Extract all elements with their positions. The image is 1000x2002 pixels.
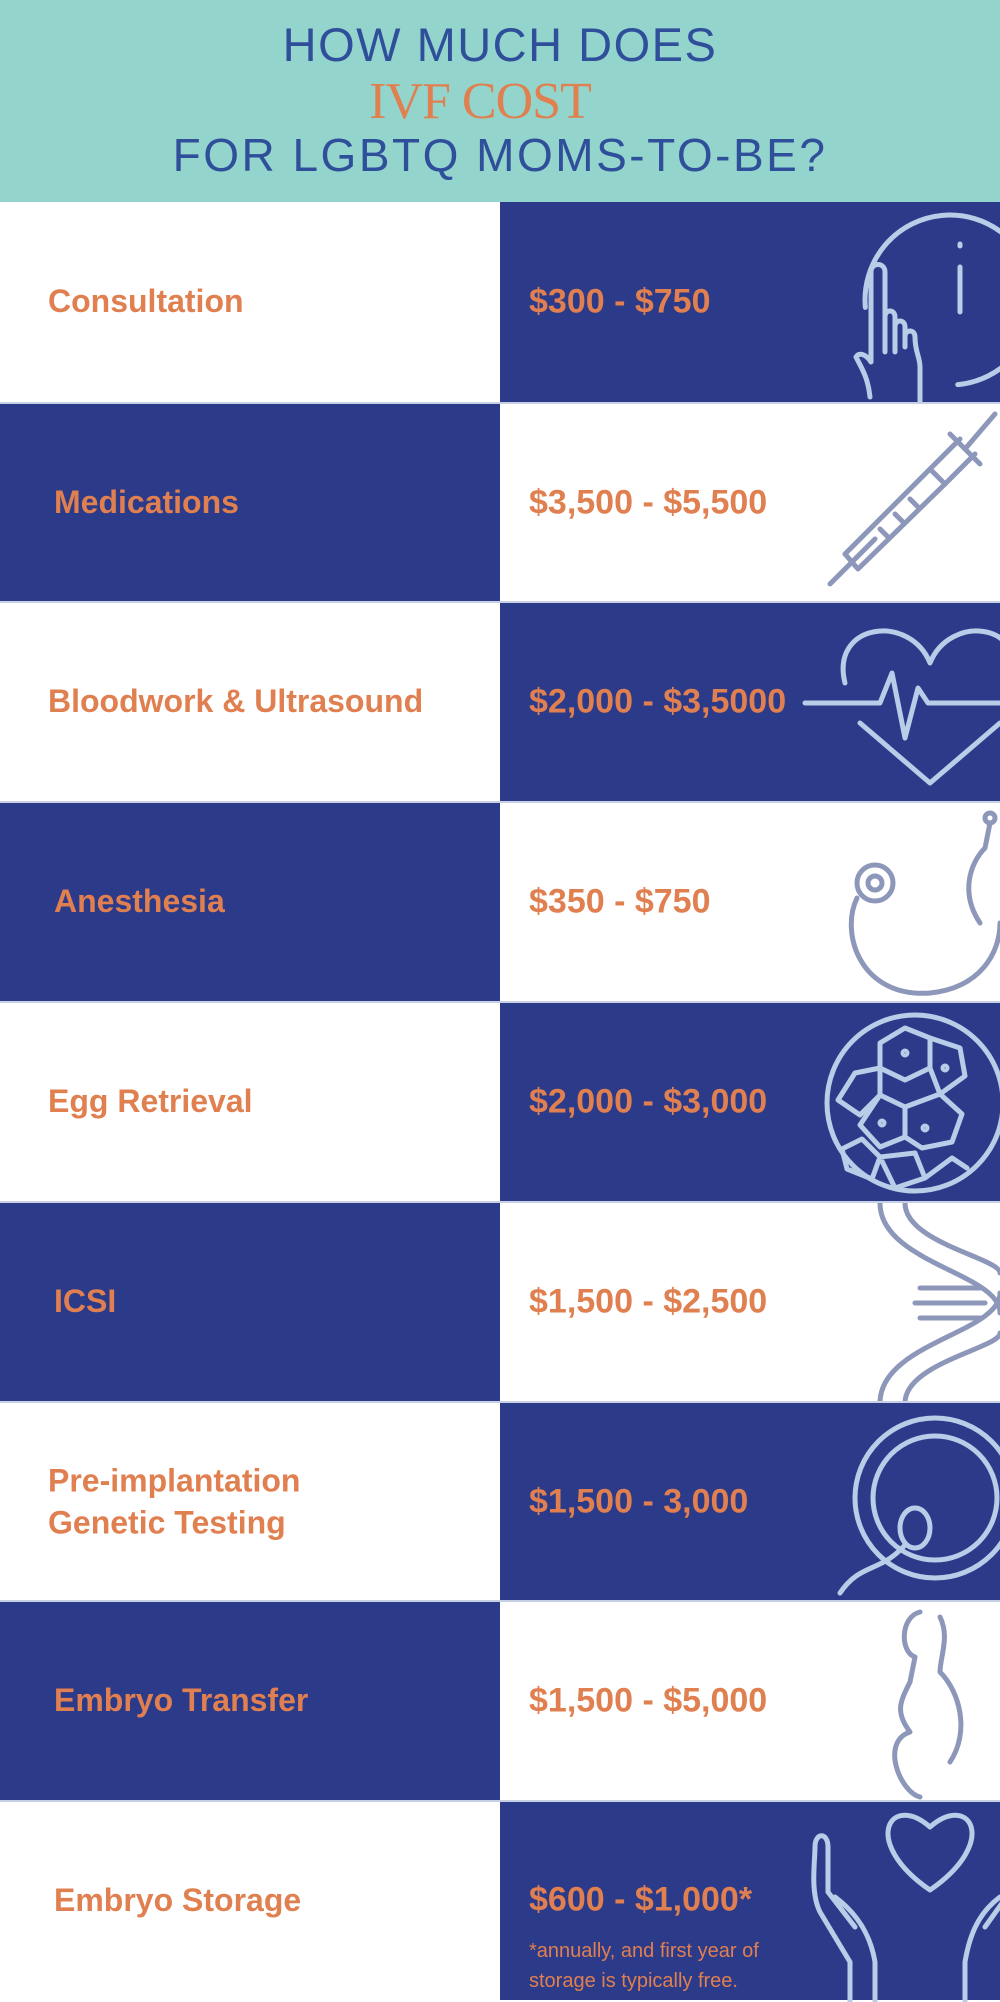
row: egg retrieval: $2,000 - $3,000 [529,1082,767,1120]
row: pgt: $1,500 - 3,000 [529,1482,748,1520]
row: bloodwork: $2,000 - $3,5000 [529,682,786,720]
row: medications: Medications [54,484,239,520]
title highlight: IVF COST [369,73,591,130]
icon: hands with heart [811,1812,1000,2002]
title line 3: FOR LGBTQ MOMS-TO-BE? [173,129,827,181]
icon: egg and sperm [838,1416,1000,1596]
row: icsi: ICSI [54,1283,116,1319]
title line 1: HOW MUCH DOES [283,18,717,71]
row: embryo transfer [0,1600,1000,1800]
footnote: *annually, and first year of [529,1940,759,1962]
row: embryo transfer: Embryo Transfer [54,1682,308,1718]
footnote [529,1940,759,1992]
row: medications: $3,500 - $5,500 [529,484,767,522]
row: icsi [0,1201,1000,1401]
row: bloodwork [0,601,1000,801]
icon: syringe [828,412,998,586]
header [0,0,1000,202]
icon: cell cluster [824,1012,1000,1194]
footnote: storage is typically free. [529,1970,738,1992]
row: embryo storage [0,1800,1000,2000]
row: medications [0,402,1000,602]
row: bloodwork: Bloodwork & Ultrasound [48,683,423,719]
row: pgt: Pre-implantation [48,1462,300,1498]
icon: info hand [854,212,1000,402]
row: consultation: Consultation [48,283,244,319]
row: embryo storage: Embryo Storage [54,1882,301,1918]
row: pgt: Genetic Testing [48,1504,286,1540]
row: anesthesia [0,801,1000,1001]
row: embryo transfer: $1,500 - $5,000 [529,1682,767,1720]
row: egg retrieval [0,1001,1000,1201]
row: pgt [0,1401,1000,1601]
row: consultation [48,202,1000,402]
row: consultation: $300 - $750 [529,282,710,320]
row: anesthesia: Anesthesia [54,883,225,919]
row: anesthesia: $350 - $750 [529,882,710,920]
icon: stethoscope [848,810,1000,996]
price: $600 - $1,000* [529,1880,752,1918]
icon: pregnant woman [892,1610,964,1800]
row: icsi: $1,500 - $2,500 [529,1282,767,1320]
row: egg retrieval: Egg Retrieval [48,1083,253,1119]
icon: heart pulse [802,628,1000,786]
icon: dna [878,1203,1000,1401]
